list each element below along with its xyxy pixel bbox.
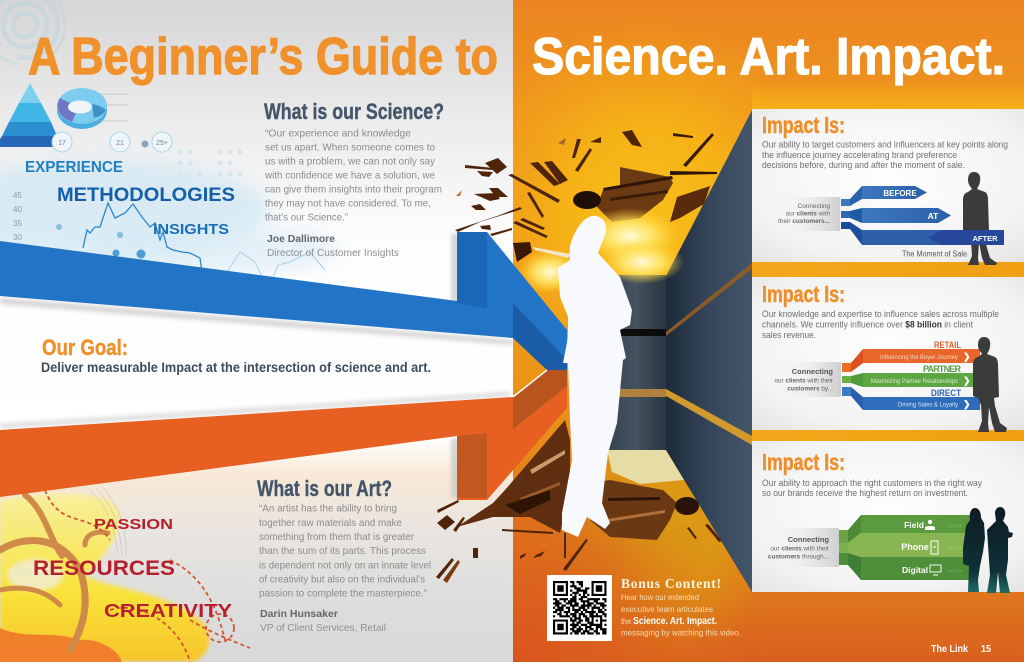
description: Our ability to approach the right customers in the right way	[762, 477, 982, 488]
secondary line chart	[225, 252, 325, 290]
art attribution	[260, 608, 386, 634]
science attribution: Joe Dallimore	[267, 233, 335, 245]
art keywords: CREATIVITY	[104, 601, 232, 621]
connector label	[774, 367, 834, 392]
art splash graphics	[0, 486, 250, 662]
connector label	[778, 203, 830, 225]
goal heading: Our Goal:	[42, 335, 128, 360]
retail band: ❯	[963, 352, 971, 362]
donut chart	[57, 88, 128, 129]
panel: impact two	[752, 277, 1024, 432]
right debris cluster	[670, 186, 710, 222]
science keywords: INSIGHTS	[153, 221, 229, 238]
upper wall stripe	[666, 263, 752, 336]
arrow body	[0, 232, 567, 372]
science keywords	[25, 159, 235, 238]
back wall black stripe	[590, 329, 666, 336]
dark sphere	[573, 191, 601, 209]
connector label: our clients with their	[770, 546, 830, 552]
central machinery	[597, 167, 673, 222]
science quote: us with a problem, we can not only say	[265, 156, 436, 168]
science keywords: EXPERIENCE	[25, 159, 123, 176]
line chart	[83, 203, 202, 272]
right page orange background	[513, 0, 1024, 662]
yellow band between panels one and two	[752, 262, 1024, 277]
pale map and data wash	[0, 160, 270, 260]
science quote: “Our experience and knowledge	[265, 128, 411, 140]
glow centre	[580, 208, 680, 264]
art quote: something from them that is greater	[259, 531, 414, 543]
science heading: What is our Science?	[264, 99, 444, 124]
lower wall stripe	[666, 389, 752, 445]
description: the influence journey accelerating brand preference	[762, 149, 957, 160]
science attribution	[267, 233, 399, 259]
debris streaks	[600, 510, 665, 523]
connector label: Connecting	[792, 367, 833, 376]
before arrow: BEFORE	[883, 189, 917, 198]
retail band: Influencing the Buyer Journey	[880, 354, 959, 361]
before arrow	[841, 186, 927, 206]
number circles: 25+	[156, 140, 168, 147]
orange arrow	[0, 370, 567, 500]
art quote: of creativity but also on the individual’s	[259, 574, 425, 586]
glow left	[518, 250, 582, 294]
man silhouette	[987, 507, 1013, 593]
yellow band between panels two and three	[752, 430, 1024, 441]
number circles: 17	[58, 140, 66, 147]
back wall	[590, 275, 666, 450]
phone band: Phone	[901, 542, 929, 552]
connector label: their customers...	[778, 218, 830, 225]
arrow shadow	[0, 298, 513, 345]
direct band: ❯	[963, 399, 971, 410]
field band: Field	[904, 520, 924, 530]
science quote: set us apart. When someone comes to	[265, 142, 435, 154]
panel: impact one	[752, 109, 1024, 265]
folio: The Link	[931, 644, 968, 655]
direct band: DIRECT	[931, 388, 961, 398]
ceiling perspective with explosion	[513, 0, 760, 340]
science attribution: Director of Customer Insights	[267, 247, 399, 259]
consideration label: CONSIDERATION	[905, 192, 957, 208]
dark floor sphere	[675, 497, 699, 515]
direct band	[842, 387, 980, 410]
after arrow: AFTER	[972, 234, 998, 243]
science quote: with confidence we have a solution, we	[264, 170, 435, 182]
field band	[861, 515, 973, 533]
arrow shadow	[0, 392, 510, 428]
green connector	[839, 515, 861, 580]
phone band	[861, 533, 973, 557]
bonus text	[621, 592, 741, 638]
brown swirls	[0, 495, 108, 650]
connector label: customers by...	[787, 386, 833, 392]
connector label box	[780, 197, 840, 231]
line chart axis: 45	[13, 191, 22, 200]
description: so our brands receive the highest return on investment.	[762, 487, 968, 498]
connector label: customers through...	[768, 554, 829, 560]
arrow block	[457, 433, 487, 498]
science quote: can give them insights into their program	[265, 184, 442, 196]
left page background	[0, 0, 513, 662]
folio: 15	[981, 644, 991, 655]
folio	[931, 644, 991, 655]
data points	[56, 224, 146, 258]
blue arrow	[0, 232, 567, 372]
field band: >>>>	[948, 524, 963, 530]
line chart axis: 40	[13, 205, 22, 214]
connector label: our clients with	[786, 210, 830, 218]
woman silhouette	[963, 508, 985, 592]
number circles: 21	[116, 140, 124, 147]
science quote: they may not have considered. To me,	[265, 198, 431, 210]
bonus heading: Bonus Content!	[621, 576, 721, 591]
art quote: is dependent not only on an innate level	[259, 560, 431, 572]
bonus text: messaging by watching this video.	[621, 628, 741, 638]
description: channels. We currently influence over $8 billion in client	[762, 318, 973, 330]
floor perspective	[513, 450, 752, 662]
line chart axis	[13, 191, 22, 242]
description: decisions before, during and after the moment of sale.	[762, 159, 965, 170]
line chart axis: 35	[13, 219, 22, 228]
red dashed curls	[45, 490, 250, 662]
digital band	[861, 557, 973, 580]
explosion shards bottom	[436, 420, 722, 583]
white chevron edge	[513, 370, 547, 397]
connector label box	[780, 362, 841, 397]
retail band	[842, 340, 980, 372]
art quote: than the sum of its parts. This process	[259, 545, 426, 557]
main title left: A Beginner’s Guide to	[28, 28, 498, 86]
at arrow: AT	[928, 211, 939, 221]
block shadow	[451, 438, 459, 498]
science quote	[264, 128, 442, 224]
QR code	[547, 575, 612, 641]
connector label box	[770, 528, 839, 567]
description: Our knowledge and expertise to influence sales across multiple	[762, 308, 999, 319]
art quote: passion to complete the masterpiece.”	[259, 588, 427, 600]
after arrow	[841, 222, 1004, 245]
goal text: Deliver measurable Impact at the intersection of science and art.	[41, 359, 431, 375]
block shadow	[451, 234, 459, 302]
connector label: Connecting	[798, 203, 830, 210]
panel: impact three	[752, 441, 1024, 593]
art heading: What is our Art?	[257, 476, 392, 501]
partner band: PARTNER	[923, 364, 962, 374]
science data graphics	[0, 0, 340, 290]
at arrow	[841, 208, 951, 223]
bonus text: Hear how our extended	[621, 592, 699, 602]
art attribution: Darin Hunsaker	[260, 608, 338, 620]
art attribution: VP of Client Services, Retail	[260, 622, 386, 634]
glow above back wall	[600, 240, 684, 284]
man silhouette	[963, 172, 997, 265]
art keywords: RESOURCES	[33, 557, 175, 580]
description	[762, 138, 1008, 170]
arrow band lighter edge	[457, 232, 487, 308]
heading: Impact Is:	[762, 281, 845, 307]
art quote: “An artist has the ability to bring	[259, 502, 397, 514]
heading: Impact Is:	[762, 112, 845, 138]
description	[762, 308, 999, 340]
arrow inner face	[513, 303, 567, 372]
right side wall	[666, 110, 752, 592]
pyramid chart	[0, 83, 62, 147]
explosion shards top	[455, 130, 717, 294]
yellow paint splash	[0, 493, 209, 662]
heading: Impact Is:	[762, 449, 845, 475]
connector label: Connecting	[788, 535, 829, 544]
man silhouette	[973, 337, 1007, 432]
partner band: Maximizing Partner Relationships	[871, 378, 958, 385]
arrow body	[0, 370, 567, 500]
description	[762, 477, 982, 498]
bonus text: executive team articulates	[621, 604, 713, 614]
orange paint blot	[0, 628, 122, 662]
digital band: Digital	[902, 565, 928, 575]
white woman silhouette	[558, 216, 632, 537]
description: sales revenue.	[762, 329, 816, 340]
art keywords	[33, 516, 232, 621]
art quote	[259, 502, 431, 600]
fine line fan	[90, 486, 126, 555]
direct band: Driving Sales & Loyalty	[898, 402, 959, 408]
partner band: ❯	[963, 376, 971, 386]
arrow inner face	[513, 370, 567, 429]
art quote: together raw materials and make	[259, 517, 402, 529]
connector label	[768, 535, 830, 560]
number circles	[52, 132, 172, 152]
bonus text: the Science. Art. Impact.	[621, 616, 717, 627]
right debris mass	[590, 480, 677, 540]
left debris wedge	[457, 420, 570, 533]
line chart axis: 30	[13, 233, 22, 242]
art keywords: PASSION	[94, 516, 173, 533]
science keywords: METHODOLOGIES	[57, 185, 235, 206]
yellow band above panels	[752, 80, 1024, 110]
concentric radar arcs	[0, 0, 65, 65]
connector label: our clients with their	[774, 378, 834, 384]
back wall orange stripe	[590, 389, 666, 397]
partner band	[842, 364, 975, 387]
dot grid	[178, 150, 242, 176]
retail band: RETAIL	[934, 340, 961, 350]
floor scene highlight	[607, 450, 684, 484]
phone band: >>>>	[948, 546, 963, 552]
speckled pale patch	[7, 559, 63, 591]
moment of sale label: The Moment of Sale	[902, 250, 967, 258]
digital band: >>>>	[948, 569, 963, 575]
floor lower-left orange tint	[513, 430, 753, 662]
science quote: that’s our Science.”	[265, 212, 348, 224]
